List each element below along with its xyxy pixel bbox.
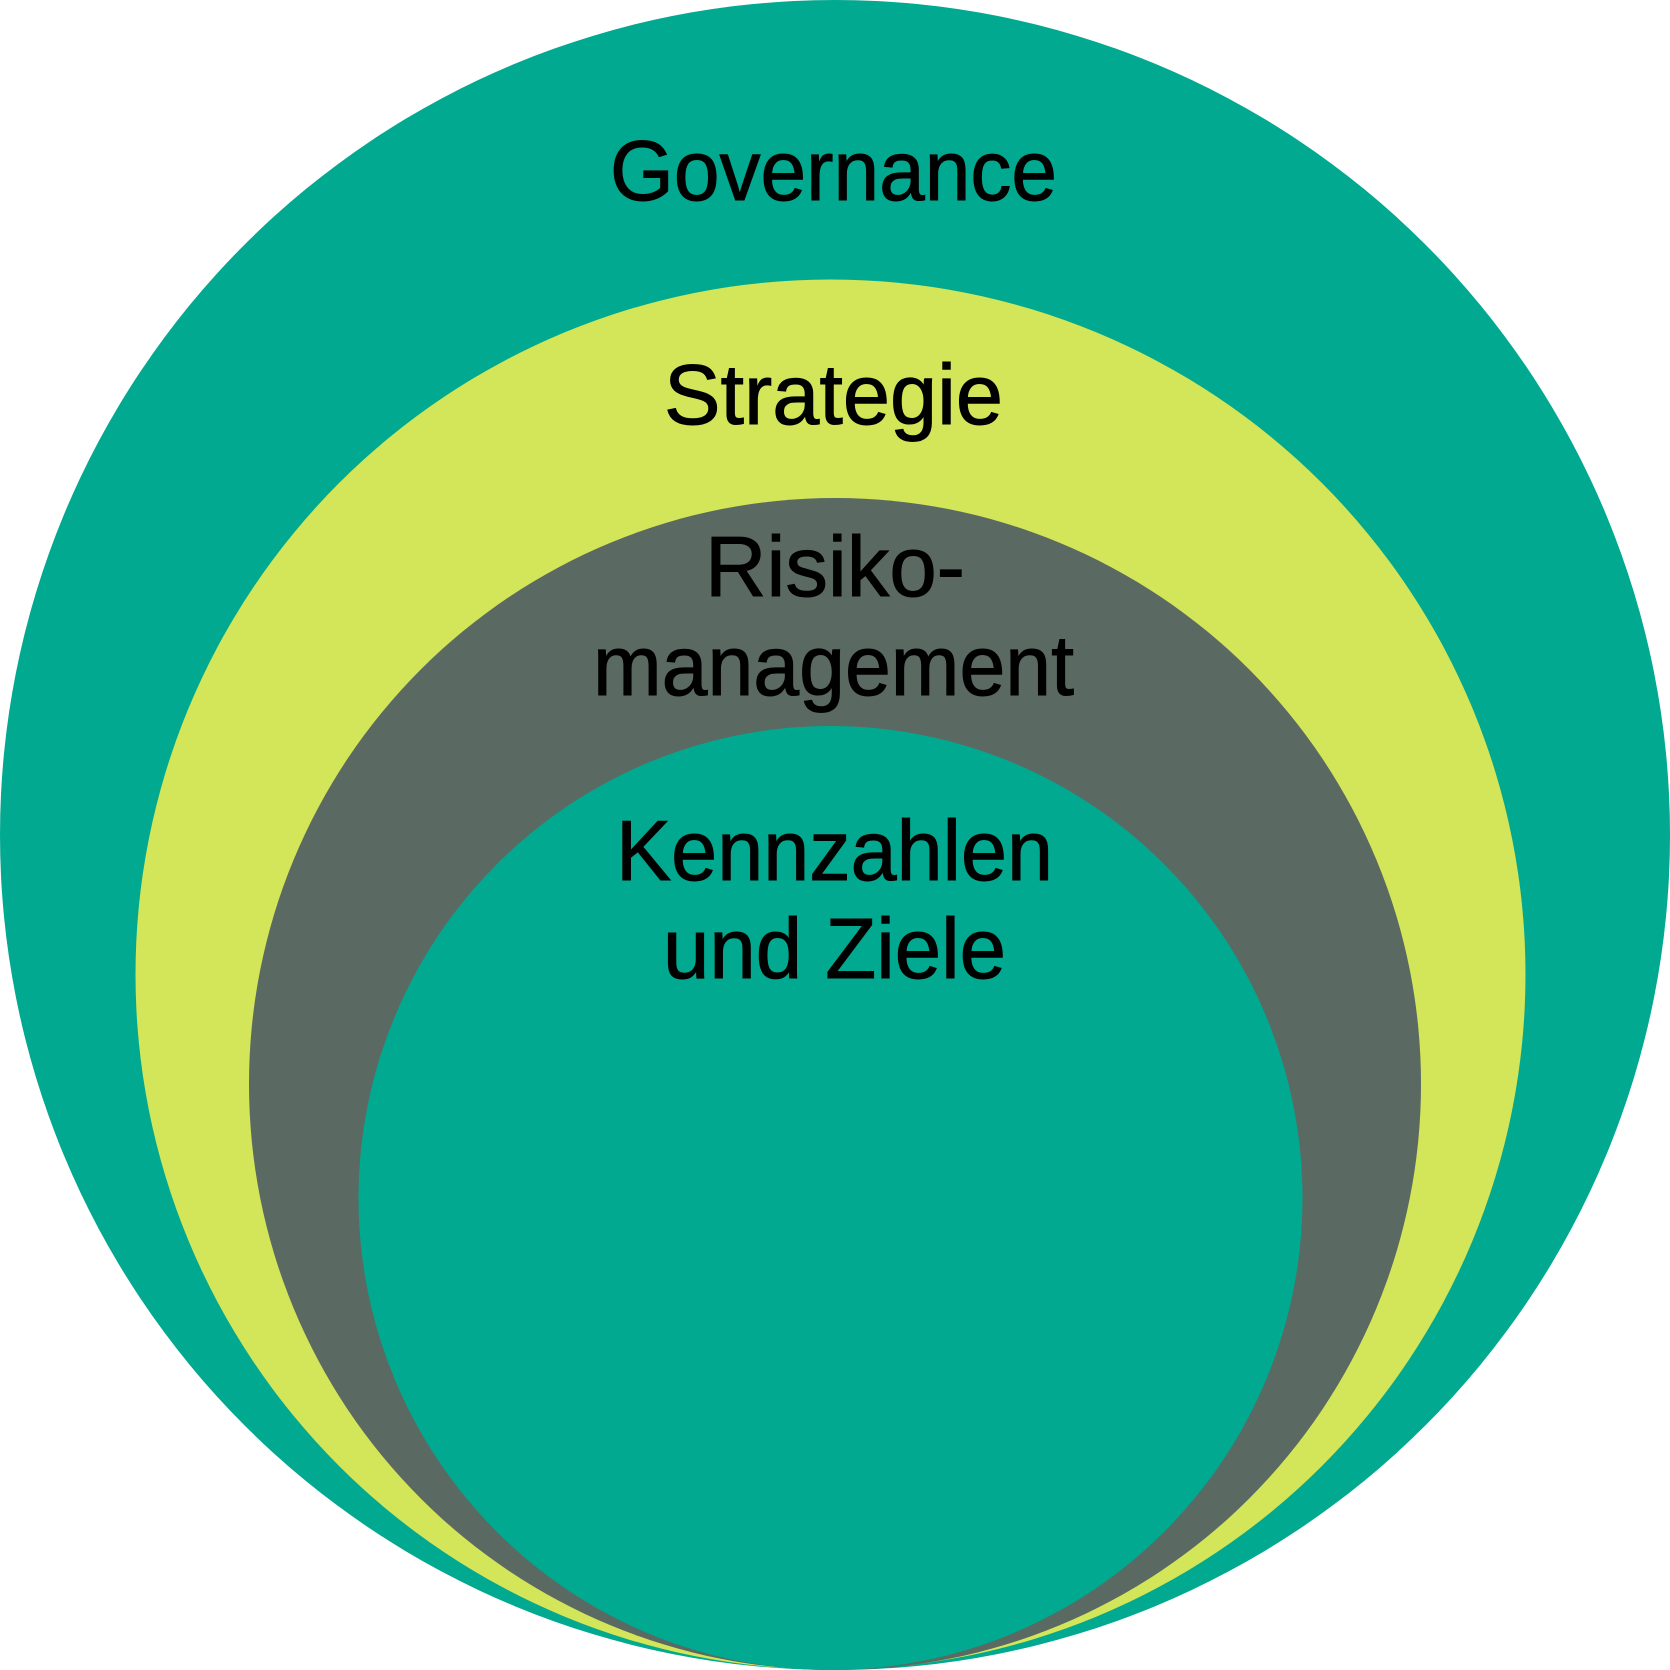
label: Risikomanagement — [593, 520, 1074, 714]
label: Strategie: Strategie — [664, 348, 1003, 443]
circle: Kennzahlen und Ziele — [358, 726, 1302, 1670]
label: Governance: Governance — [610, 124, 1057, 219]
circle: Strategie — [136, 280, 1526, 1670]
label: Kennzahlen und Ziele — [616, 804, 1053, 997]
label: Kennzahlen und Ziele: und Ziele — [663, 902, 1006, 997]
label: Risikomanagement: Risiko- — [705, 520, 965, 615]
circle: Risikomanagement — [249, 498, 1421, 1670]
label: Risikomanagement: management — [593, 619, 1074, 714]
label: Kennzahlen und Ziele: Kennzahlen — [616, 804, 1053, 899]
